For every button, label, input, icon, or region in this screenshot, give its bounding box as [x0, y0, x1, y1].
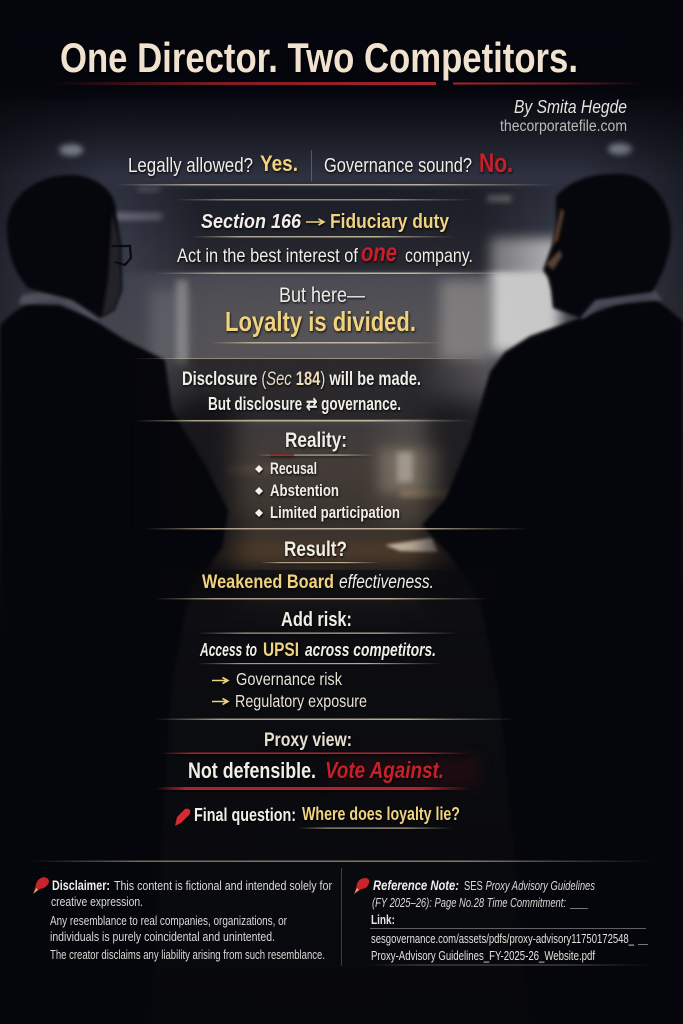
panel: reference note: Link:: [371, 912, 395, 927]
bullet list: Recusal: [270, 459, 317, 478]
result: Weakened Board: [202, 571, 334, 593]
panel: reference note: [354, 878, 652, 966]
icon: red pin: [33, 877, 49, 894]
panel: disclaimer: Disclaimer:: [52, 878, 110, 893]
one company line: company.: [405, 245, 473, 267]
section 166: Fiduciary duty: [330, 210, 450, 233]
panel: reference note: Reference Note:: [373, 878, 459, 893]
add risk: UPSI: [263, 640, 299, 661]
title underline: [51, 82, 643, 85]
bullet list: [255, 459, 400, 522]
icon: glasses: [112, 246, 131, 265]
final question: [175, 803, 460, 829]
verdict row: Governance sound?: [324, 154, 472, 177]
arrow: [306, 219, 324, 225]
add risk: Add risk:: [281, 609, 352, 631]
verdict row: No.: [479, 148, 513, 178]
panel: disclaimer: Any resemblance to real companies, organizations, or: [50, 913, 288, 928]
result: [202, 538, 434, 593]
disclosure: But disclosure ⇄ governance.: [208, 394, 401, 414]
panel: reference note: SES Proxy Advisory Guidelines: [464, 878, 595, 893]
icon: red pin: [354, 878, 369, 894]
silhouette: right man: [422, 174, 683, 1024]
loyalty divided: But here—: [279, 284, 365, 307]
verdict row: Yes.: [260, 151, 298, 176]
final question: Where does loyalty lie?: [302, 803, 460, 824]
one company line: Act in the best interest of: [177, 245, 358, 267]
arrow: [212, 698, 228, 704]
verdict row: Legally allowed?: [128, 154, 253, 177]
soft shadows beside the figures: [165, 400, 235, 610]
reality: Reality:: [285, 429, 347, 452]
bullet list: Abstention: [270, 481, 339, 500]
disclosure: Disclosure (Sec 184) will be made.: [182, 369, 421, 390]
byline: [500, 96, 627, 135]
proxy view: Not defensible.: [188, 758, 316, 783]
final question: Final question:: [194, 805, 296, 825]
bullet list: Limited participation: [270, 503, 400, 522]
one company line: one: [361, 237, 397, 267]
panel: reference note: (FY 2025–26): Page No.28 Time Commitment:: [372, 895, 566, 910]
panel: disclaimer: creative expression.: [51, 894, 143, 909]
panel: disclaimer: The creator disclaims any liability arising from such resemblance.: [50, 947, 325, 962]
section 166: [201, 210, 450, 233]
icon: pencil: [175, 809, 190, 826]
byline: By Smita Hegde: [514, 96, 627, 117]
disclosure: [182, 369, 421, 414]
result: Result?: [284, 538, 347, 561]
add risk: Regulatory exposure: [235, 691, 367, 711]
proxy view: [155, 730, 470, 790]
reality: [255, 429, 400, 522]
add risk: Governance risk: [236, 669, 342, 689]
proxy view: Proxy view:: [264, 730, 352, 751]
add risk: Access to: [199, 640, 257, 660]
arrow: [212, 678, 228, 684]
add risk: [197, 609, 460, 711]
silhouette: left man: [0, 175, 228, 1024]
section 166: Section 166: [201, 210, 302, 233]
verdict row: [128, 148, 513, 178]
dark text bands: [105, 186, 575, 788]
loyalty divided: Loyalty is divided.: [225, 306, 416, 337]
panel: disclaimer: This content is fictional and intended solely for: [114, 878, 333, 893]
loyalty divided: [225, 284, 416, 337]
one company line: [177, 237, 473, 267]
result: effectiveness.: [339, 572, 434, 593]
title: One Director. Two Competitors.: [60, 34, 578, 81]
byline: thecorporatefile.com: [500, 118, 627, 135]
panel: disclaimer: [33, 877, 333, 962]
proxy view: Vote Against.: [325, 757, 444, 783]
add risk: across competitors.: [305, 640, 436, 660]
panel: disclaimer: individuals is purely coincidental and unintented.: [50, 929, 275, 944]
panel: reference note: Proxy-Advisory Guidelines_FY-2025-26_Website.pdf: [371, 948, 595, 963]
